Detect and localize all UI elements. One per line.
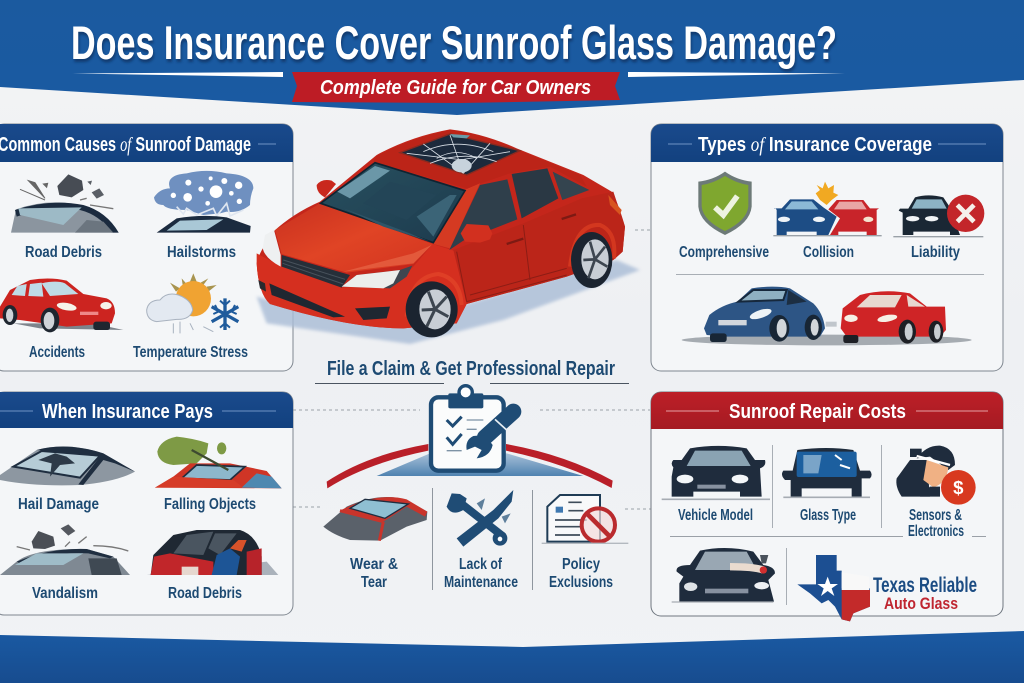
icons in zoom coordinates xyxy=(0,171,253,333)
heading: when insurance pays xyxy=(0,392,293,428)
label: sensors and electronics: Sensors & xyxy=(909,507,962,524)
icon: sensors and electronics xyxy=(896,446,976,505)
icon: temperature stress xyxy=(147,273,238,333)
connector lines xyxy=(275,230,680,509)
panel: types of insurance coverage xyxy=(651,124,1003,371)
label: vandalism: Vandalism xyxy=(32,585,98,602)
panel: sunroof repair costs xyxy=(651,392,1003,621)
bottom blue band xyxy=(0,631,1024,683)
label: hailstorms: Hailstorms xyxy=(167,244,236,261)
icon: clipboard and wrench xyxy=(431,386,513,471)
label: wear and tear xyxy=(350,556,398,591)
icon: hail damage xyxy=(0,447,135,485)
icon: accidents car xyxy=(0,278,123,332)
heading: repair costs xyxy=(651,392,1003,429)
label: accidents: Accidents xyxy=(29,344,85,361)
heading: when insurance pays: When Insurance Pays xyxy=(42,401,213,423)
top blue banner xyxy=(0,0,1024,115)
icon: road debris car xyxy=(147,530,278,575)
label: collision: Collision xyxy=(803,244,854,261)
heading: common causes: Common Causes of Sunroof Damage xyxy=(0,134,251,156)
label: road debris: Road Debris xyxy=(25,244,102,261)
label: liability: Liability xyxy=(911,244,960,261)
label: sensors and electronics xyxy=(908,507,964,540)
label: temperature stress: Temperature Stress xyxy=(133,344,248,361)
windshield xyxy=(321,163,465,243)
label: wear and tear: Wear & xyxy=(350,556,398,573)
subtitle ribbon xyxy=(72,72,845,103)
icon: vehicle model xyxy=(662,446,770,499)
icon: hailstorms xyxy=(154,171,253,233)
panel: common causes xyxy=(0,124,293,371)
label: road debris: Road Debris xyxy=(168,585,242,602)
grille and lights xyxy=(258,230,412,320)
heading: repair costs: Sunroof Repair Costs xyxy=(729,401,906,423)
icon: shield xyxy=(698,172,752,235)
label: policy exclusions: Exclusions xyxy=(549,574,613,591)
car shadow xyxy=(257,260,640,344)
icon: sensors and electronics: $ xyxy=(953,477,964,498)
label: lack of maintenance: Lack of xyxy=(459,556,503,573)
label: lack of maintenance: Maintenance xyxy=(444,574,518,591)
main red car xyxy=(257,129,640,344)
icon: liability xyxy=(893,195,984,237)
label: lack of maintenance xyxy=(444,556,518,591)
icon: texas logo xyxy=(797,555,870,621)
icon: falling objects xyxy=(155,437,282,488)
side windows xyxy=(449,168,589,250)
label: falling objects: Falling Objects xyxy=(164,496,256,513)
label: wear and tear: Tear xyxy=(361,574,387,591)
logo text: Auto Glass xyxy=(884,594,958,613)
icon: collision xyxy=(773,182,882,236)
center section heading: File a Claim & Get Professional Repair xyxy=(327,358,615,380)
logo text xyxy=(873,574,977,613)
wheels xyxy=(406,225,614,337)
label: sensors and electronics: Electronics xyxy=(908,523,964,540)
car body xyxy=(257,129,625,328)
icon: crossed tools xyxy=(447,490,513,547)
heading: types of coverage: Types of Insurance Coverage xyxy=(698,134,932,156)
heading: common causes xyxy=(0,124,293,162)
label: glass type: Glass Type xyxy=(800,507,856,524)
icon: vandalism xyxy=(0,524,130,575)
label: policy exclusions xyxy=(549,556,613,591)
subtitle: Complete Guide for Car Owners xyxy=(320,77,591,99)
panel: when insurance pays xyxy=(0,392,293,615)
icon: road debris xyxy=(11,174,119,233)
red arc with blue base xyxy=(327,444,613,488)
heading: types of coverage xyxy=(651,124,1003,162)
icon: two cars xyxy=(682,287,972,345)
label: hail damage: Hail Damage xyxy=(18,496,99,513)
mirrors xyxy=(317,180,492,243)
label: comprehensive: Comprehensive xyxy=(679,244,769,261)
icon: policy exclusions xyxy=(542,495,628,543)
shattered sunroof xyxy=(400,134,520,175)
icon: car with wrench xyxy=(672,548,775,602)
label: vehicle model: Vehicle Model xyxy=(678,507,753,524)
label: policy exclusions: Policy xyxy=(562,556,600,573)
logo text: Texas Reliable xyxy=(873,574,977,597)
icon: glass type xyxy=(782,448,872,497)
icon: wear and tear roof xyxy=(323,497,427,541)
